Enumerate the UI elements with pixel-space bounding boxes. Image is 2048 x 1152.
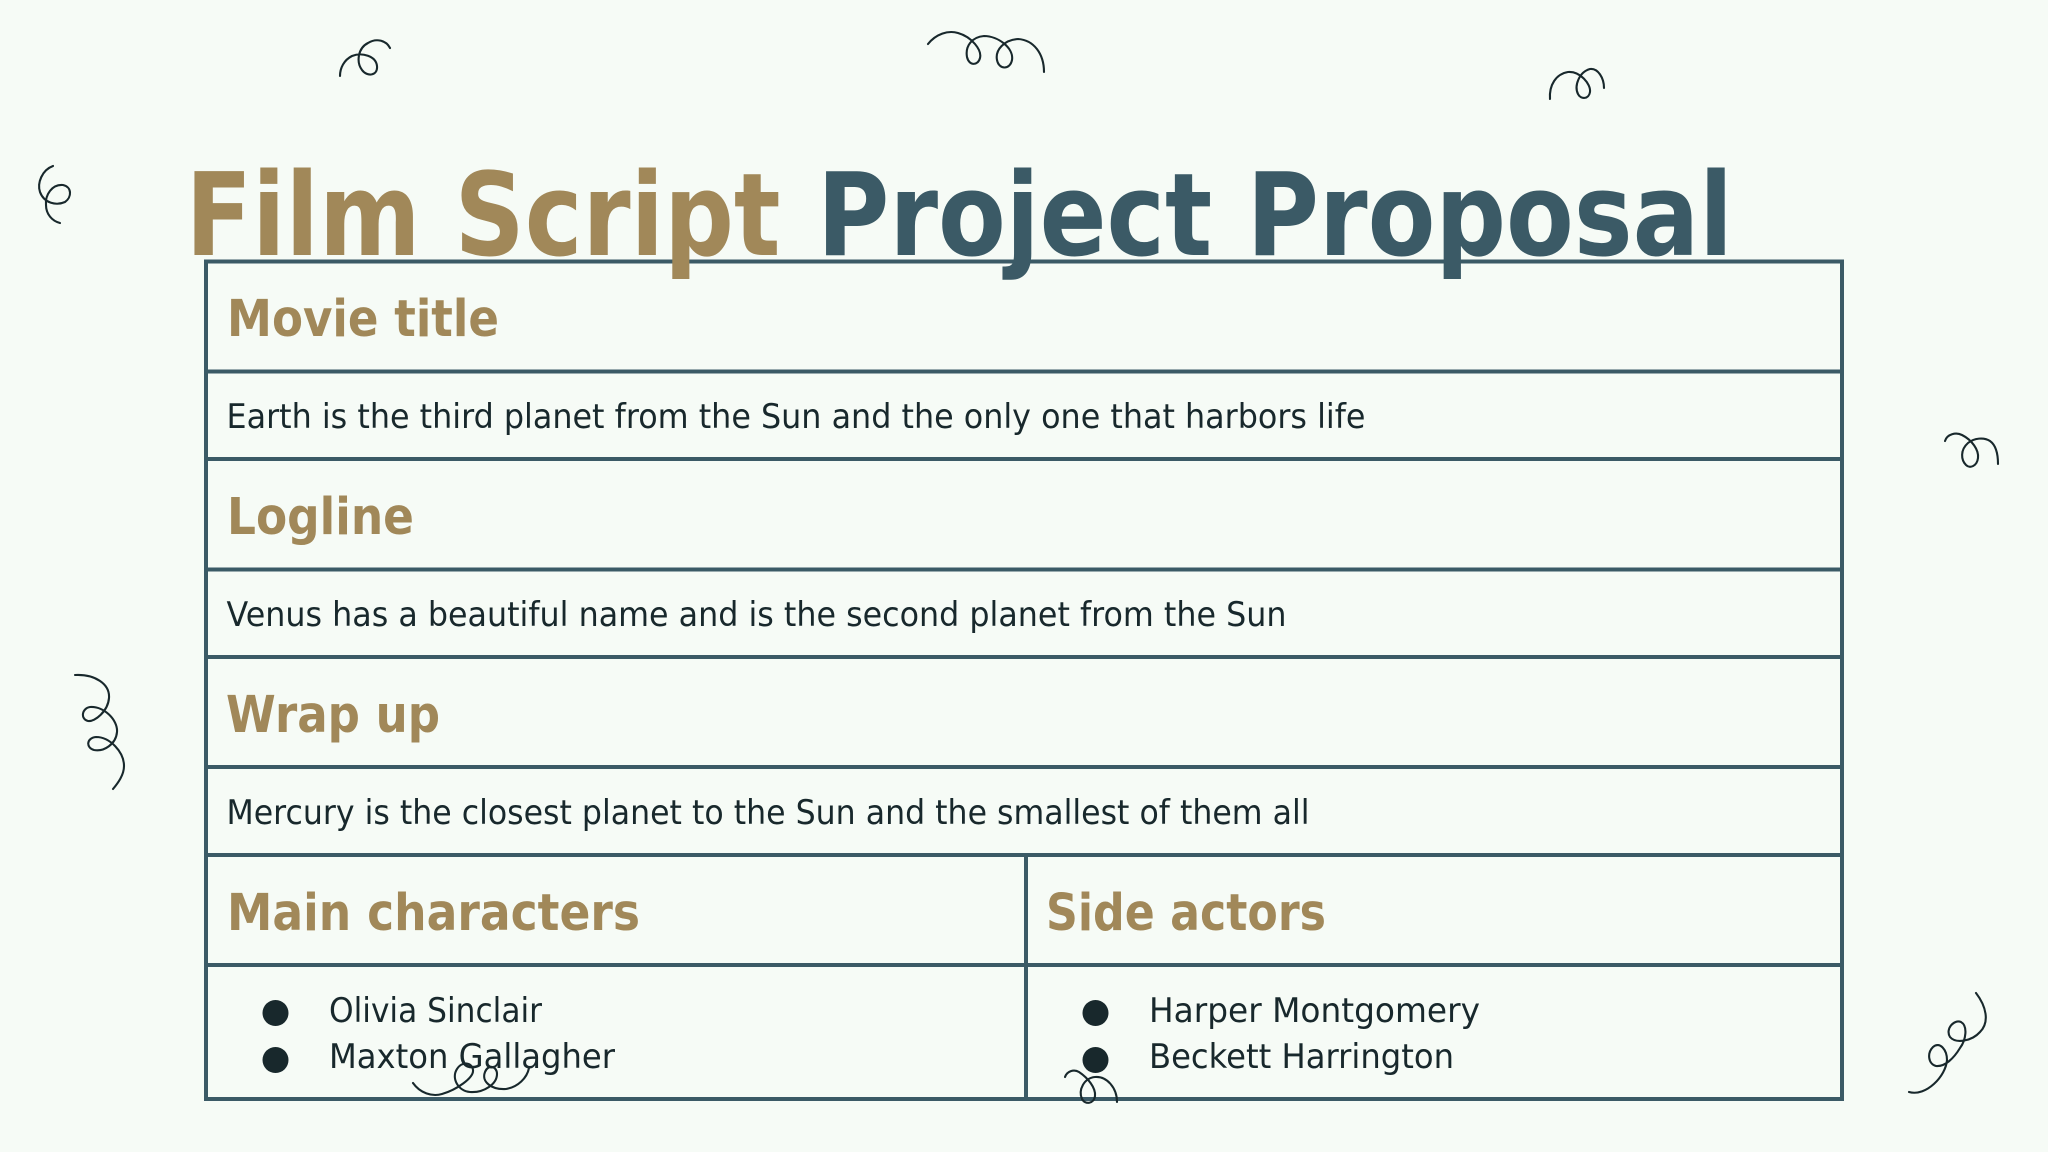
title: Project Proposal	[817, 149, 1733, 283]
text: logline description: Venus has a beautiful name and is the second planet from the Sun	[226, 595, 1286, 635]
table grid	[206, 262, 1842, 1099]
title	[186, 149, 1733, 283]
list: main characters	[262, 991, 615, 1077]
heading: logline: Logline	[227, 487, 414, 546]
heading: side actors: Side actors	[1046, 883, 1326, 942]
text: movie title description: Earth is the third planet from the Sun and the only one that harbors life	[226, 397, 1366, 437]
list: main characters: Olivia Sinclair	[329, 991, 542, 1031]
heading: wrap up: Wrap up	[226, 685, 440, 744]
title: Film Script	[186, 149, 780, 283]
list: main characters: Maxton Gallagher	[329, 1037, 615, 1077]
list: side actors	[1082, 991, 1480, 1077]
heading: main characters: Main characters	[227, 883, 640, 942]
text: wrap up description: Mercury is the closest planet to the Sun and the smallest of them all	[226, 793, 1310, 833]
list: side actors: Harper Montgomery	[1149, 991, 1480, 1031]
list: side actors: Beckett Harrington	[1149, 1037, 1454, 1077]
heading: movie title: Movie title	[227, 289, 499, 348]
